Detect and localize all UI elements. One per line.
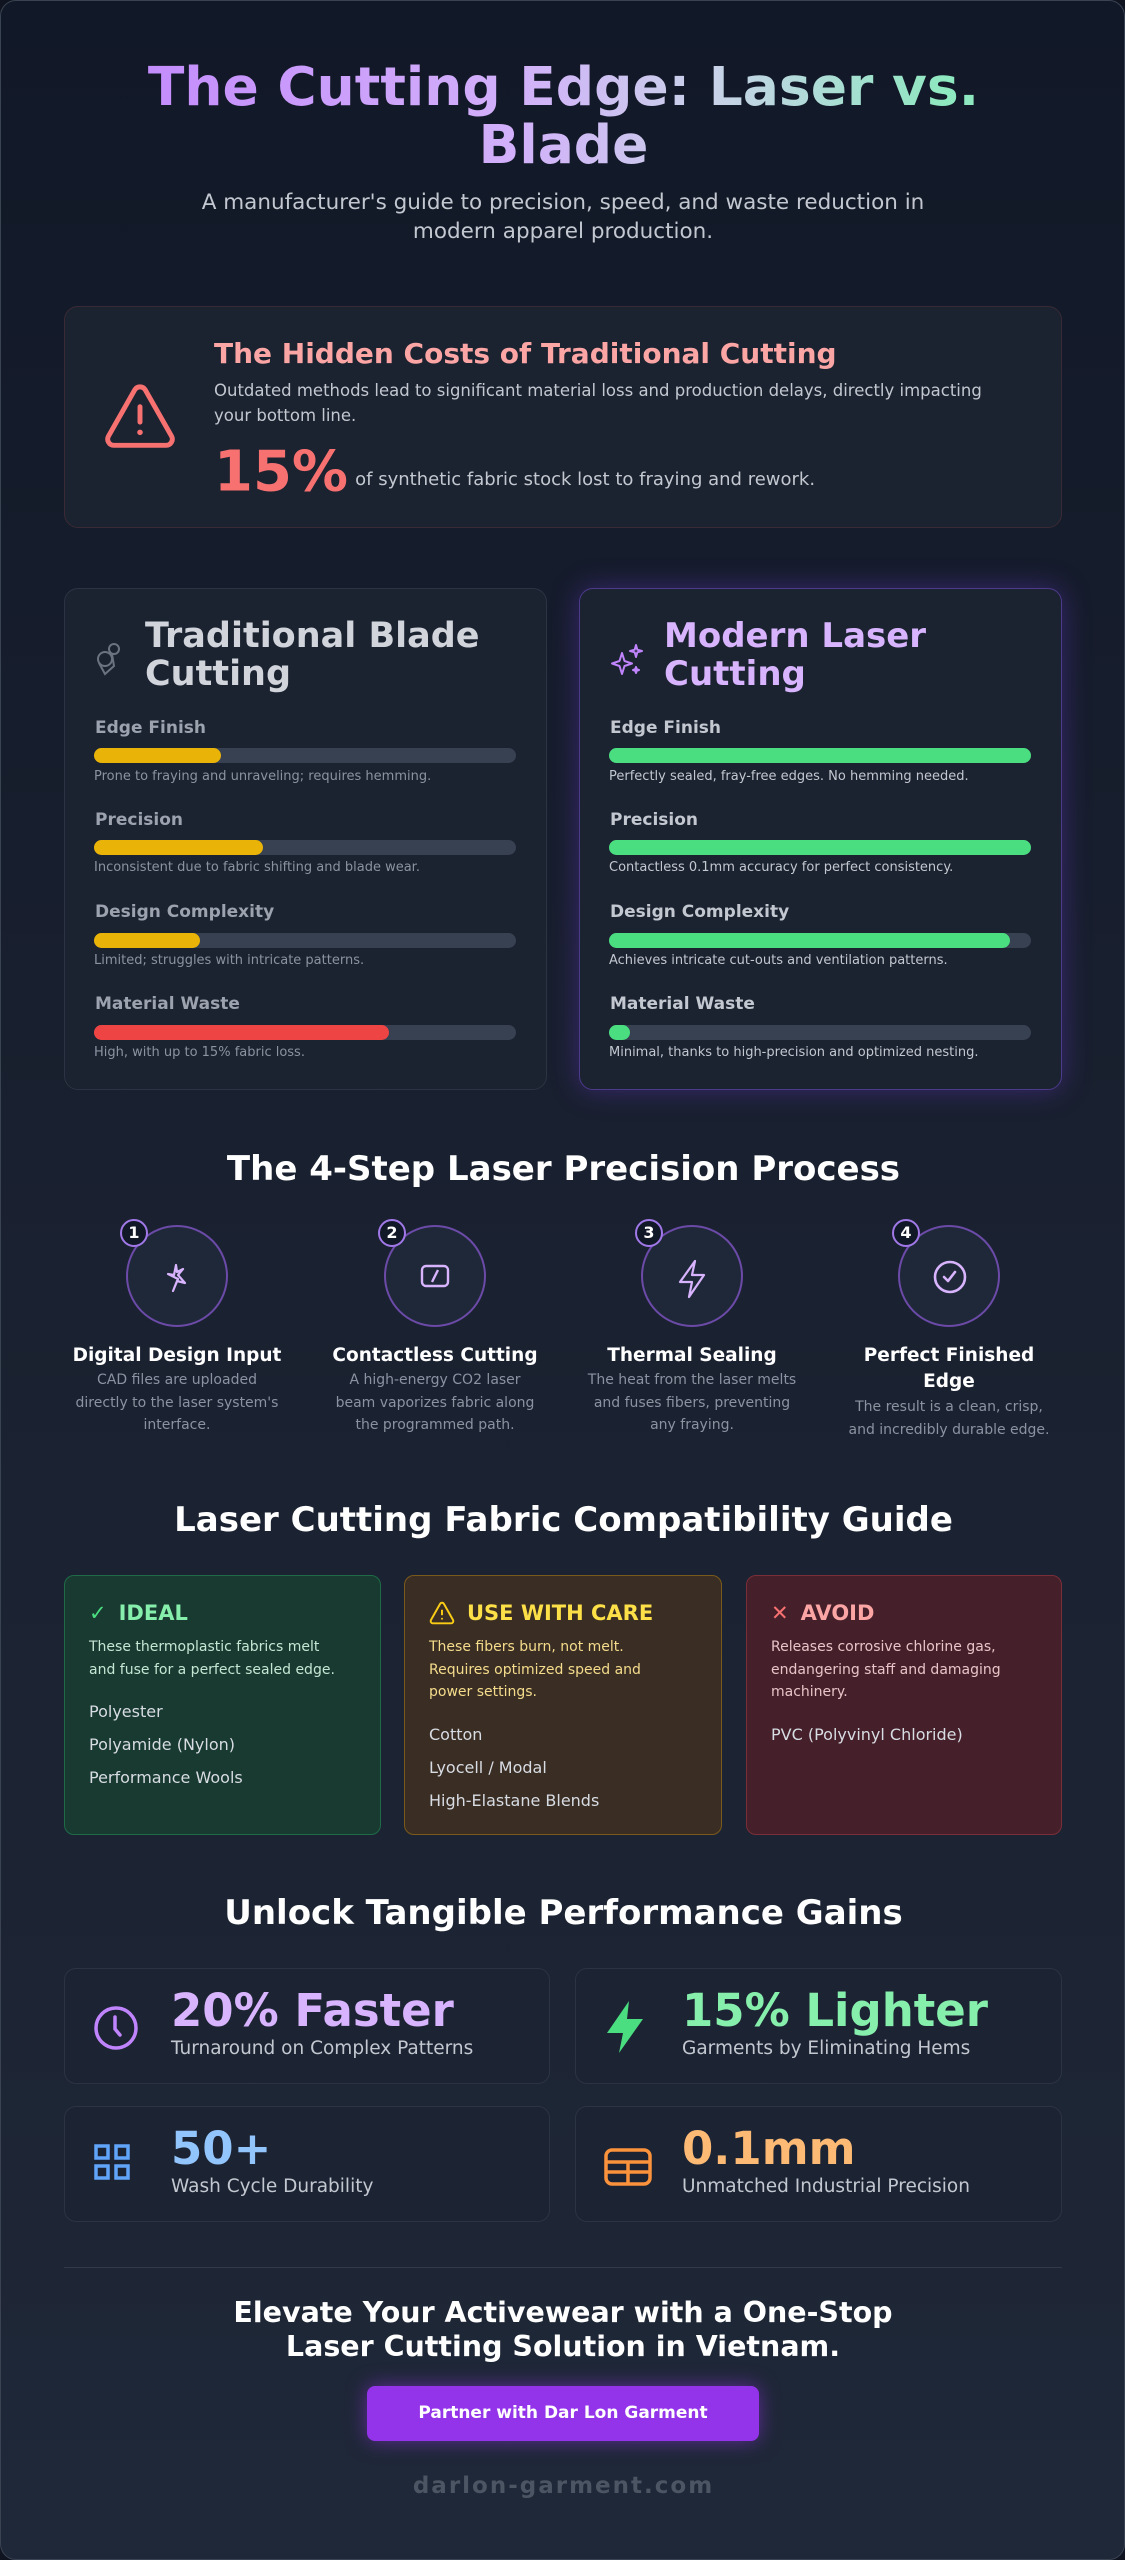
panel: use with care: These fibers burn, not melt. — [429, 1639, 624, 1655]
heading: 4-step process: The 4-Step Laser Precision Process — [227, 1149, 900, 1189]
step 2: beam vaporizes fabric along — [336, 1394, 534, 1410]
panel: modern laser cutting: Minimal, thanks to high-precision and optimized nesting. — [609, 1045, 978, 1060]
panel: avoid: PVC (Polyvinyl Chloride) — [771, 1724, 963, 1744]
button: partner — [367, 2386, 759, 2441]
stat: 20% faster: Turnaround on Complex Patterns — [171, 2038, 473, 2059]
heading: Traditional Blade — [145, 616, 480, 656]
heading: compatibility guide: Laser Cutting Fabric Compatibility Guide — [174, 1500, 953, 1540]
panel: modern laser cutting: Perfectly sealed, fray-free edges. No hemming needed. — [609, 769, 969, 784]
step 1: Digital Design Input — [73, 1345, 281, 1366]
text: description: Outdated methods lead to significant material loss and production delays, directly impacting your bottom line. — [214, 381, 982, 425]
step 3: Thermal Sealing — [607, 1345, 777, 1366]
panel: modern laser cutting: Contactless 0.1mm accuracy for perfect consistency. — [609, 860, 953, 875]
panel: traditional blade cutting: Edge Finish — [95, 718, 206, 738]
bar: complexity — [609, 933, 1031, 948]
panel: use with care — [404, 1575, 722, 1835]
stat: 50+ — [64, 2106, 550, 2222]
heading: Cutting — [664, 654, 806, 694]
step 4: The result is a clean, crisp, — [855, 1399, 1043, 1415]
panel: traditional blade cutting: Precision — [95, 810, 183, 830]
heading — [145, 616, 480, 694]
panel: modern laser cutting: Material Waste — [610, 994, 755, 1014]
panel: avoid — [746, 1575, 1062, 1835]
step 2 — [332, 1219, 538, 1433]
heading — [664, 616, 926, 694]
stat: 15%: 15% of synthetic fabric stock lost to fraying and rework. — [214, 440, 815, 504]
panel: modern laser cutting: Edge Finish — [610, 718, 721, 738]
panel: modern laser cutting — [579, 588, 1062, 1090]
panel: use with care: High-Elastane Blends — [429, 1790, 599, 1810]
panel: traditional blade cutting: Design Complexity — [95, 902, 274, 922]
title: Blade — [479, 113, 648, 176]
panel: ideal fabrics: IDEAL — [119, 1601, 188, 1625]
stat: 15% lighter — [575, 1968, 1062, 2084]
heading: Cutting — [145, 654, 291, 694]
panel: ideal fabrics: These thermoplastic fabrics melt — [89, 1639, 319, 1655]
subtitle: A manufacturer's guide to precision, speed, and waste reduction in modern apparel production. — [202, 190, 924, 244]
step 4: and incredibly durable edge. — [848, 1422, 1049, 1438]
bar: waste — [94, 1025, 516, 1040]
panel: traditional blade cutting: High, with up to 15% fabric loss. — [94, 1045, 305, 1060]
stat: 0.1mm: Unmatched Industrial Precision — [682, 2176, 970, 2197]
icon: warning triangle — [105, 384, 175, 448]
panel: traditional blade cutting — [64, 588, 547, 1090]
button: partner: Partner with Dar Lon Garment — [418, 2403, 708, 2423]
step 4 — [848, 1219, 1049, 1438]
stat: 20% faster: 20% Faster — [171, 1984, 454, 2037]
bar: edge finish — [609, 748, 1031, 763]
panel: traditional blade cutting: Limited; struggles with intricate patterns. — [94, 953, 364, 968]
step 2: 2 — [386, 1223, 398, 1242]
heading: Modern Laser — [664, 616, 926, 656]
step 3: The heat from the laser melts — [588, 1372, 796, 1388]
panel: use with care: Cotton — [429, 1724, 482, 1744]
step 2: Contactless Cutting — [332, 1345, 538, 1366]
stat: 20% faster — [64, 1968, 550, 2084]
icon: design spark — [166, 1264, 186, 1292]
title: The Cutting Edge: Laser vs. — [148, 55, 979, 118]
panel: modern laser cutting: Precision — [610, 810, 698, 830]
step 1: directly to the laser system's — [76, 1394, 278, 1410]
step 1: interface. — [144, 1417, 210, 1433]
step 4: Perfect Finished — [864, 1345, 1034, 1366]
step 3: 3 — [643, 1223, 655, 1242]
panel: ideal fabrics: and fuse for a perfect sealed edge. — [89, 1662, 335, 1678]
panel: traditional blade cutting: Prone to fraying and unraveling; requires hemming. — [94, 769, 431, 784]
stat: 0.1mm — [575, 2106, 1062, 2222]
step 3: and fuses fibers, preventing — [594, 1394, 790, 1410]
bar: waste — [609, 1025, 1031, 1040]
footer url: darlon-garment.com — [413, 2473, 714, 2499]
heading: hidden costs: The Hidden Costs of Traditional Cutting — [214, 337, 837, 370]
panel: use with care: power settings. — [429, 1684, 537, 1700]
title — [61, 58, 1066, 174]
step 4: 4 — [900, 1223, 912, 1242]
step 2: A high-energy CO2 laser — [349, 1372, 521, 1388]
CTA heading: Elevate Your Activewear with a One-Stop Laser Cutting Solution in Vietnam. — [233, 2296, 893, 2363]
panel: traditional blade cutting: Material Waste — [95, 994, 240, 1014]
bar: precision — [94, 840, 516, 855]
panel: use with care: Requires optimized speed and — [429, 1662, 641, 1678]
panel: ideal fabrics: Polyamide (Nylon) — [89, 1735, 235, 1754]
panel: traditional blade cutting: Inconsistent due to fabric shifting and blade wear. — [94, 860, 420, 875]
icon: lightning — [678, 1260, 706, 1298]
panel: avoid: machinery. — [771, 1684, 848, 1700]
step 2: the programmed path. — [355, 1417, 515, 1433]
panel: hidden costs alert — [64, 306, 1062, 528]
icon: sparkles — [611, 644, 643, 675]
icon: blade — [97, 643, 120, 676]
panel: avoid: AVOID — [801, 1601, 874, 1625]
panel: avoid: endangering staff and damaging — [771, 1662, 1001, 1678]
icon: cutting window — [420, 1264, 450, 1288]
step 1 — [73, 1219, 281, 1433]
stat: 15% lighter: Garments by Eliminating Hems — [682, 2038, 970, 2059]
stat: 0.1mm: 0.1mm — [682, 2122, 856, 2175]
panel: modern laser cutting: Design Complexity — [610, 902, 789, 922]
step 4: Edge — [923, 1371, 975, 1392]
panel: ideal fabrics: ✓ — [89, 1601, 107, 1625]
panel: ideal fabrics: Polyester — [89, 1702, 163, 1721]
icon: check circle — [934, 1260, 966, 1294]
stat: 50+: 50+ — [171, 2122, 271, 2175]
bar: complexity — [94, 933, 516, 948]
panel: use with care: Lyocell / Modal — [429, 1758, 547, 1776]
stat: 15% lighter: 15% Lighter — [682, 1984, 988, 2037]
panel: avoid: ✕ — [771, 1601, 789, 1625]
bar: precision — [609, 840, 1031, 855]
panel: use with care: USE WITH CARE — [467, 1601, 653, 1625]
panel: modern laser cutting: Achieves intricate cut-outs and ventilation patterns. — [609, 953, 948, 968]
panel: ideal fabrics — [64, 1575, 381, 1835]
step 1: 1 — [128, 1223, 140, 1242]
heading: performance gains: Unlock Tangible Performance Gains — [224, 1893, 903, 1933]
panel: ideal fabrics: Performance Wools — [89, 1768, 243, 1787]
bar: edge finish — [94, 748, 516, 763]
stat: 50+: Wash Cycle Durability — [171, 2176, 373, 2197]
step 3 — [588, 1219, 796, 1433]
panel: avoid: Releases corrosive chlorine gas, — [771, 1639, 996, 1655]
step 1: CAD files are uploaded — [97, 1372, 257, 1388]
step 3: any fraying. — [650, 1417, 734, 1433]
